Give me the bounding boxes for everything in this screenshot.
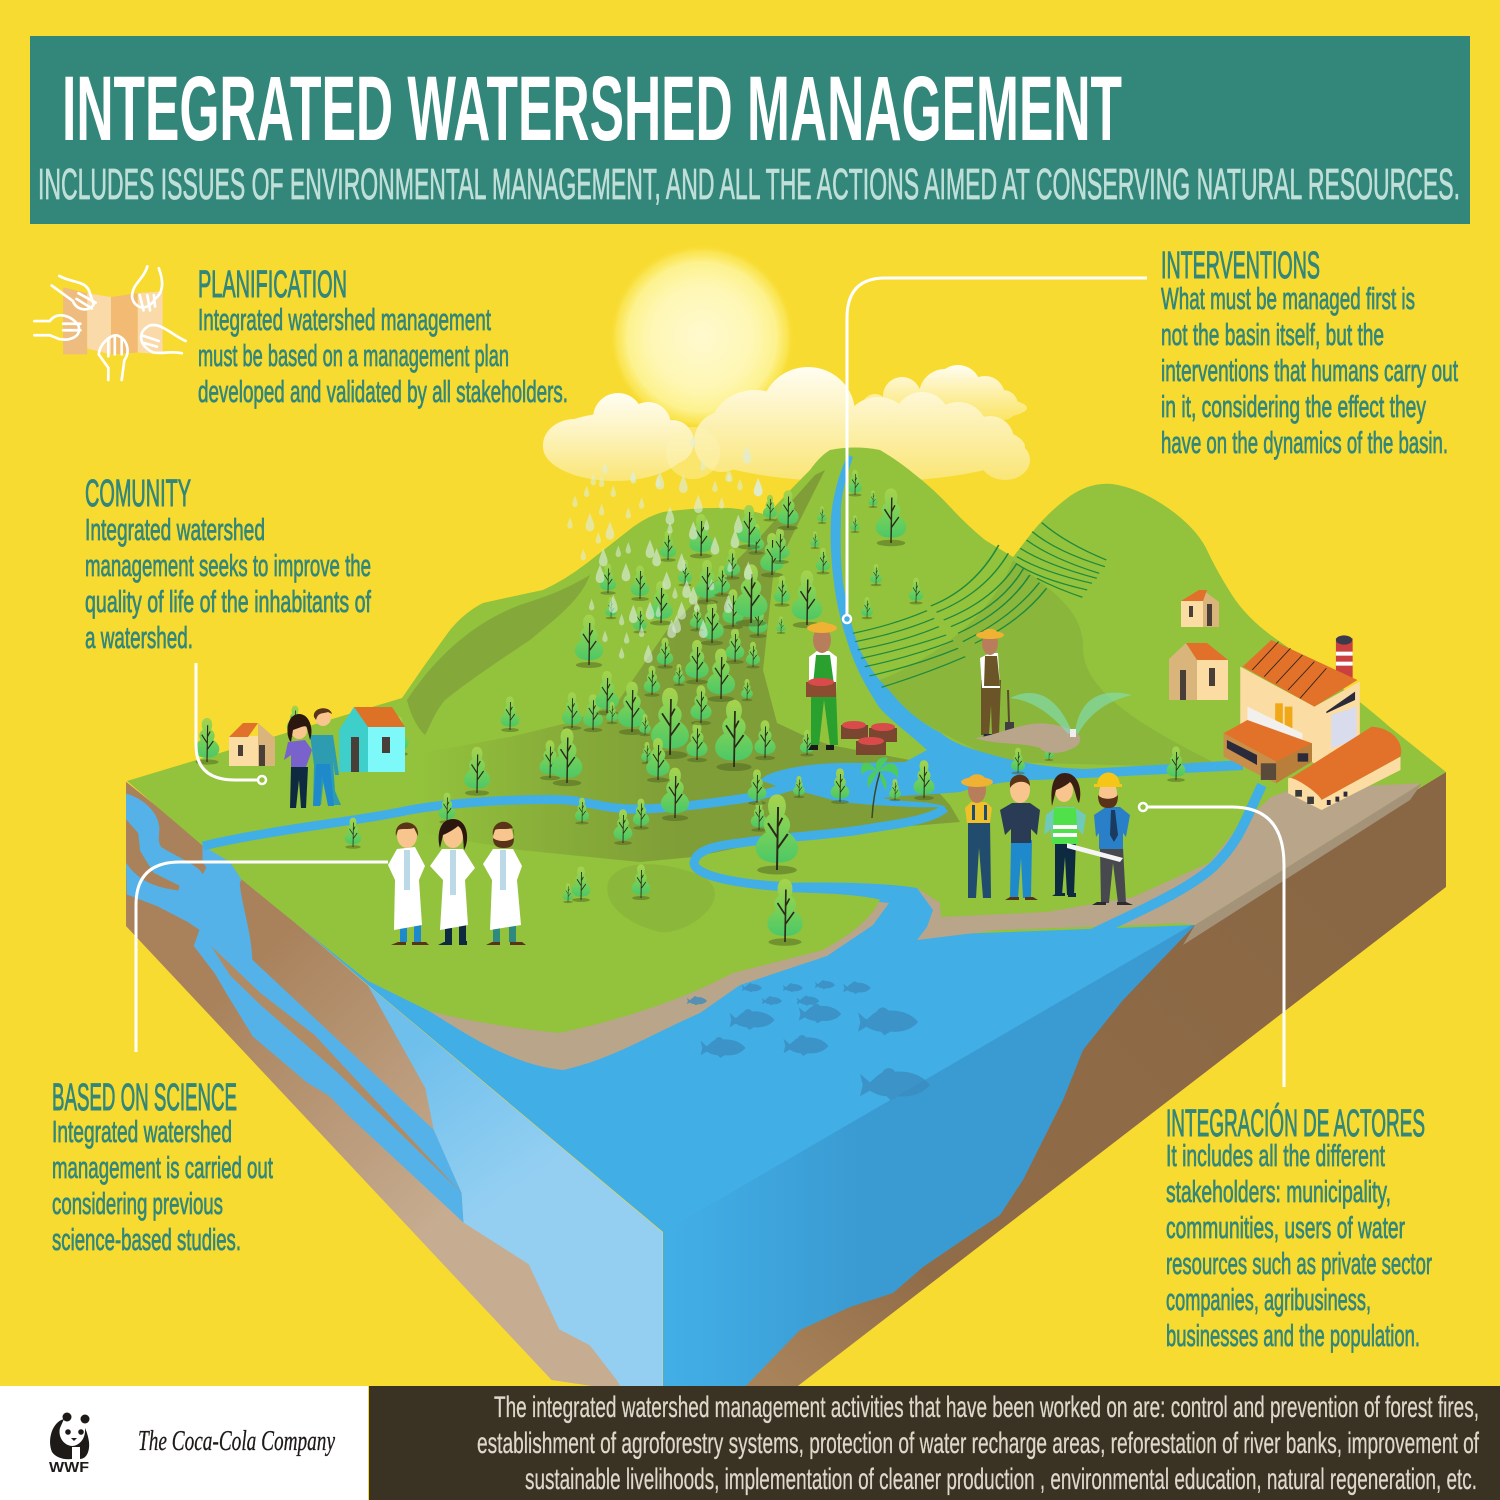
- heading and text: planification: [198, 264, 568, 409]
- scientist 1: [388, 822, 429, 945]
- lowland shading lobe: [607, 864, 715, 932]
- heading and text: based on science: science-based studies.: [52, 1222, 241, 1257]
- terraced fields: [853, 523, 1106, 687]
- heading and text: planification: Integrated watershed management: [198, 302, 491, 337]
- heading and text: interventions: [1161, 245, 1458, 460]
- heading and text: comunity: management seeks to improve the: [85, 548, 371, 583]
- mountain river and wide central reach: [760, 455, 1243, 807]
- scientist 3: [483, 822, 526, 945]
- heading and text: interventions: INTERVENTIONS: [1161, 245, 1320, 287]
- land surface: [127, 448, 1446, 1033]
- river mouth: [780, 883, 933, 960]
- left shore sand: [429, 900, 889, 1070]
- left hill shading band: [407, 575, 590, 735]
- forest slope shading: [400, 470, 960, 862]
- icon: hands on a map: [34, 266, 186, 380]
- fruit crates: [841, 721, 897, 755]
- sun: [609, 244, 795, 430]
- irrigated plot: [975, 693, 1132, 753]
- factory: [1224, 635, 1401, 810]
- lake shadow: [663, 923, 1200, 1395]
- couple: [284, 708, 341, 808]
- heading and text: based on science: management is carried out: [52, 1150, 273, 1185]
- heading and text: comunity: a watershed.: [85, 620, 193, 655]
- header banner: [30, 36, 1470, 224]
- heading and text: based on science: considering previous: [52, 1186, 223, 1221]
- valley shading: [880, 560, 1225, 768]
- right cliff face: [740, 772, 1446, 1392]
- heading and text: based on science: [52, 1077, 273, 1257]
- The Coca-Cola Company wordmark: The Coca-Cola Company: [138, 1426, 335, 1457]
- small tan house: [229, 723, 275, 766]
- shore edge band: [1183, 783, 1422, 945]
- heading and text: based on science: BASED ON SCIENCE: [52, 1077, 237, 1119]
- heading and text: planification: developed and validated by all stakeholders.: [198, 374, 568, 409]
- footer text bar: [369, 1386, 1500, 1500]
- connector: based on science: [136, 862, 388, 1052]
- footer logo panel: [0, 1386, 368, 1500]
- WWF panda logo: WWF: [49, 1459, 89, 1476]
- trees: [195, 470, 1185, 946]
- woman: [1044, 773, 1086, 897]
- heading and text: comunity: COMUNITY: [85, 473, 191, 515]
- right shore sand: [917, 783, 1422, 940]
- back cloud: [862, 365, 1027, 422]
- heading and text: integracion de actores: [1166, 1102, 1432, 1353]
- scientist 2: [430, 819, 475, 945]
- farmer with shovel: [976, 629, 1014, 738]
- engineer: [1067, 772, 1133, 905]
- teal house: [339, 707, 405, 772]
- heading and text: planification: PLANIFICATION: [198, 264, 347, 306]
- farmer: [961, 774, 993, 898]
- factory stream: [1088, 785, 1262, 936]
- palm tree: [861, 757, 898, 818]
- left cloud: [543, 393, 694, 481]
- connector: comunity: [196, 663, 266, 784]
- connector: integracion de actores: [1139, 803, 1284, 1087]
- fish: [687, 980, 930, 1100]
- heading and text: comunity: quality of life of the inhabitants of: [85, 584, 371, 619]
- upper houses: [1169, 590, 1228, 700]
- man: [1000, 775, 1040, 900]
- main cloud: [694, 367, 1030, 482]
- lake: [202, 843, 1200, 1395]
- WWF panda logo: [49, 1412, 90, 1476]
- heading and text: planification: must be based on a management plan: [198, 338, 509, 373]
- scientists: [388, 819, 526, 945]
- left cliff face with streams: [126, 782, 663, 1393]
- main river west: [203, 785, 795, 846]
- heading and text: comunity: [85, 473, 371, 655]
- stakeholder group: [961, 772, 1133, 905]
- farmer with crate: [806, 622, 838, 750]
- small translucent cloud: [666, 427, 720, 479]
- heading and text: based on science: Integrated watershed: [52, 1114, 232, 1149]
- rivers: [203, 455, 1262, 960]
- rain: [567, 435, 763, 663]
- thin lower loop: [694, 808, 945, 887]
- heading and text: comunity: Integrated watershed: [85, 512, 265, 547]
- connector: interventions: [843, 278, 1147, 623]
